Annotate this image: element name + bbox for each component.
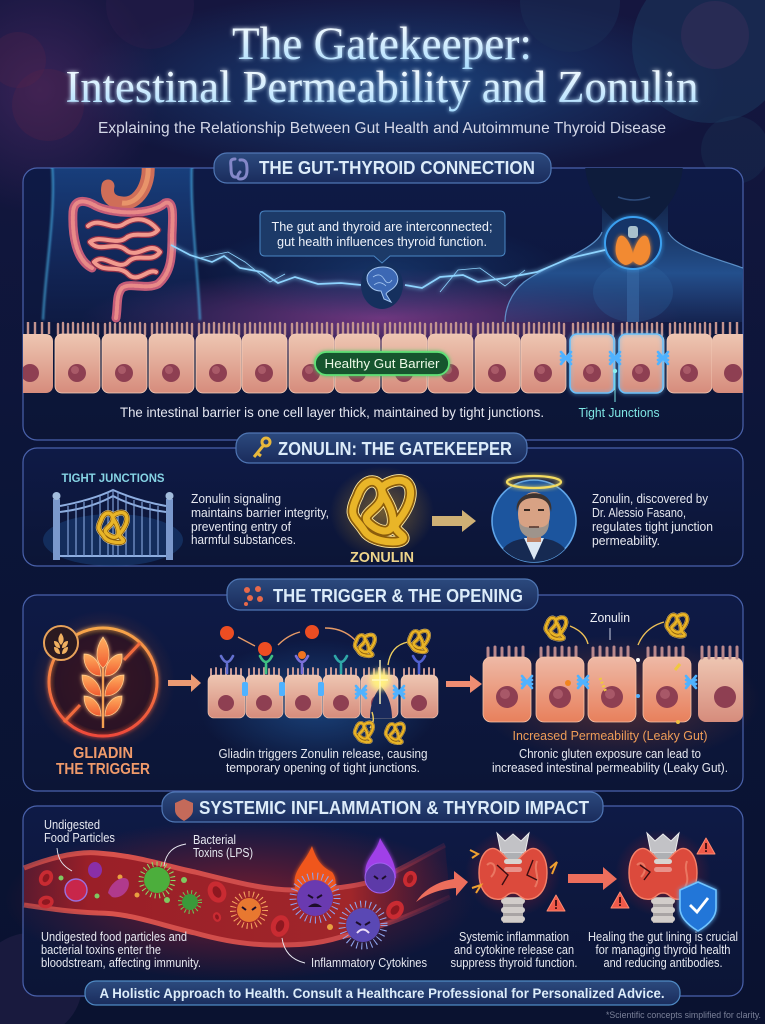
zonulin protein (330, 466, 434, 566)
callout: gut health influences thyroid function. (277, 234, 487, 249)
bacteria (141, 864, 200, 912)
bloodstream caption: bloodstream, affecting immunity. (41, 956, 201, 970)
leaky gut caption: Increased Permeability (Leaky Gut) (512, 728, 708, 743)
gliadin label (56, 745, 150, 778)
thyroid suppression caption (450, 930, 578, 970)
panel: systemic inflammation (5, 806, 743, 996)
arrow (416, 871, 468, 902)
zonulin signaling text: Zonulin signaling (191, 492, 281, 506)
brain icon (361, 266, 403, 309)
zonulin label with arrows (546, 611, 687, 645)
healing caption: Healing the gut lining is crucial (588, 930, 738, 944)
fasano text: Zonulin, discovered by (592, 492, 709, 506)
bloodstream caption: Undigested food particles and (41, 930, 187, 944)
zonulin signaling text (191, 492, 329, 547)
labels on vessel: Bacterial (193, 833, 236, 847)
leaky gut caption: Chronic gluten exposure can lead to (519, 747, 701, 761)
footer banner (85, 981, 680, 1005)
callout: The gut and thyroid are interconnected; (272, 219, 492, 234)
zonulin signaling text: harmful substances. (191, 533, 296, 547)
zonulin protein: ZONULIN (350, 549, 414, 566)
footer banner: A Holistic Approach to Health. Consult a Healthcare Professional for Personalized Advice. (100, 985, 664, 1001)
gliadin caption (218, 747, 428, 775)
zonulin label with arrows: Zonulin (590, 611, 630, 625)
thyroid suppression caption: Systemic inflammation (459, 930, 569, 944)
healing caption (588, 930, 738, 970)
title: The Gatekeeper: (232, 18, 532, 70)
subtitle: Explaining the Relationship Between Gut Health and Autoimmune Thyroid Disease (98, 120, 666, 137)
tight junction opening diagram (208, 625, 438, 743)
thyroid suppression caption: and cytokine release can (454, 943, 574, 957)
healing caption: and reducing antibodies. (604, 956, 722, 970)
food particles (65, 862, 129, 901)
bloodstream caption (41, 930, 201, 970)
title: Intestinal Permeability and Zonulin (66, 62, 698, 112)
fasano text: Dr. Alessio Fasano, (592, 506, 686, 520)
tight junctions label (578, 369, 660, 420)
callout (260, 211, 505, 263)
tight junctions label: Tight Junctions (578, 406, 660, 420)
neck and shoulders with thyroid (505, 165, 743, 322)
labels on vessel: Undigested (44, 818, 100, 832)
bloodstream caption: bacterial toxins enter the (41, 943, 161, 957)
heading: systemic inflammation: SYSTEMIC INFLAMMATION & THYROID IMPACT (199, 798, 589, 818)
labels on vessel (44, 818, 427, 970)
leaky gut caption: increased intestinal permeability (Leaky Gut). (492, 761, 728, 775)
healthy gut barrier label (315, 352, 449, 375)
healthy gut barrier label: Healthy Gut Barrier (324, 356, 440, 371)
healing caption: for managing thyroid health (596, 943, 731, 957)
leaky gut cells (483, 647, 743, 724)
torso with intestines (43, 165, 200, 322)
panel: trigger (23, 595, 760, 791)
zonulin signaling text: preventing entry of (191, 520, 291, 534)
gut barrier cells (15, 322, 752, 393)
title (66, 18, 698, 112)
portrait of Dr. Fasano (492, 476, 576, 562)
arrow (168, 674, 201, 692)
healing thyroid with shield (611, 829, 716, 931)
fasano text (592, 492, 713, 548)
thyroid suppression caption: suppress thyroid function. (450, 956, 578, 970)
heading: gut-thyroid connection: THE GUT-THYROID CONNECTION (259, 158, 535, 178)
gate icon (43, 471, 183, 566)
panel: gut-thyroid connection (15, 165, 752, 440)
arrow (446, 675, 482, 693)
labels on vessel: Inflammatory Cytokines (311, 956, 427, 970)
cytokines (233, 838, 396, 946)
footnote: *Scientific concepts simplified for clarity. (606, 1010, 761, 1020)
heading: systemic inflammation (162, 792, 603, 822)
blood vessel (24, 845, 450, 945)
gliadin caption: temporary opening of tight junctions. (226, 761, 420, 775)
gliadin label: GLIADIN (73, 745, 133, 762)
gliadin caption: Gliadin triggers Zonulin release, causing (218, 747, 428, 761)
inflamed thyroid (465, 829, 565, 923)
arrow (568, 867, 617, 890)
fasano text: regulates tight junction (592, 520, 713, 534)
lightning connection (171, 245, 605, 292)
heading: trigger: THE TRIGGER & THE OPENING (273, 586, 523, 606)
heading: gut-thyroid connection (214, 153, 551, 183)
arrow (432, 510, 476, 532)
heading: zonulin (236, 433, 527, 463)
barrier caption: The intestinal barrier is one cell layer thick, maintained by tight junctions. (120, 405, 544, 420)
fasano text: permeability. (592, 534, 660, 548)
gliadin label: THE TRIGGER (56, 761, 150, 778)
zonulin signaling text: maintains barrier integrity, (191, 506, 329, 520)
heading: trigger (227, 579, 538, 610)
labels on vessel: Food Particles (44, 831, 115, 845)
gate icon: TIGHT JUNCTIONS (62, 471, 164, 485)
panel: zonulin (23, 448, 743, 566)
labels on vessel: Toxins (LPS) (193, 846, 253, 860)
gliadin no-wheat icon (44, 626, 157, 736)
leaky gut caption (492, 728, 728, 775)
heading: zonulin: ZONULIN: THE GATEKEEPER (278, 439, 512, 459)
